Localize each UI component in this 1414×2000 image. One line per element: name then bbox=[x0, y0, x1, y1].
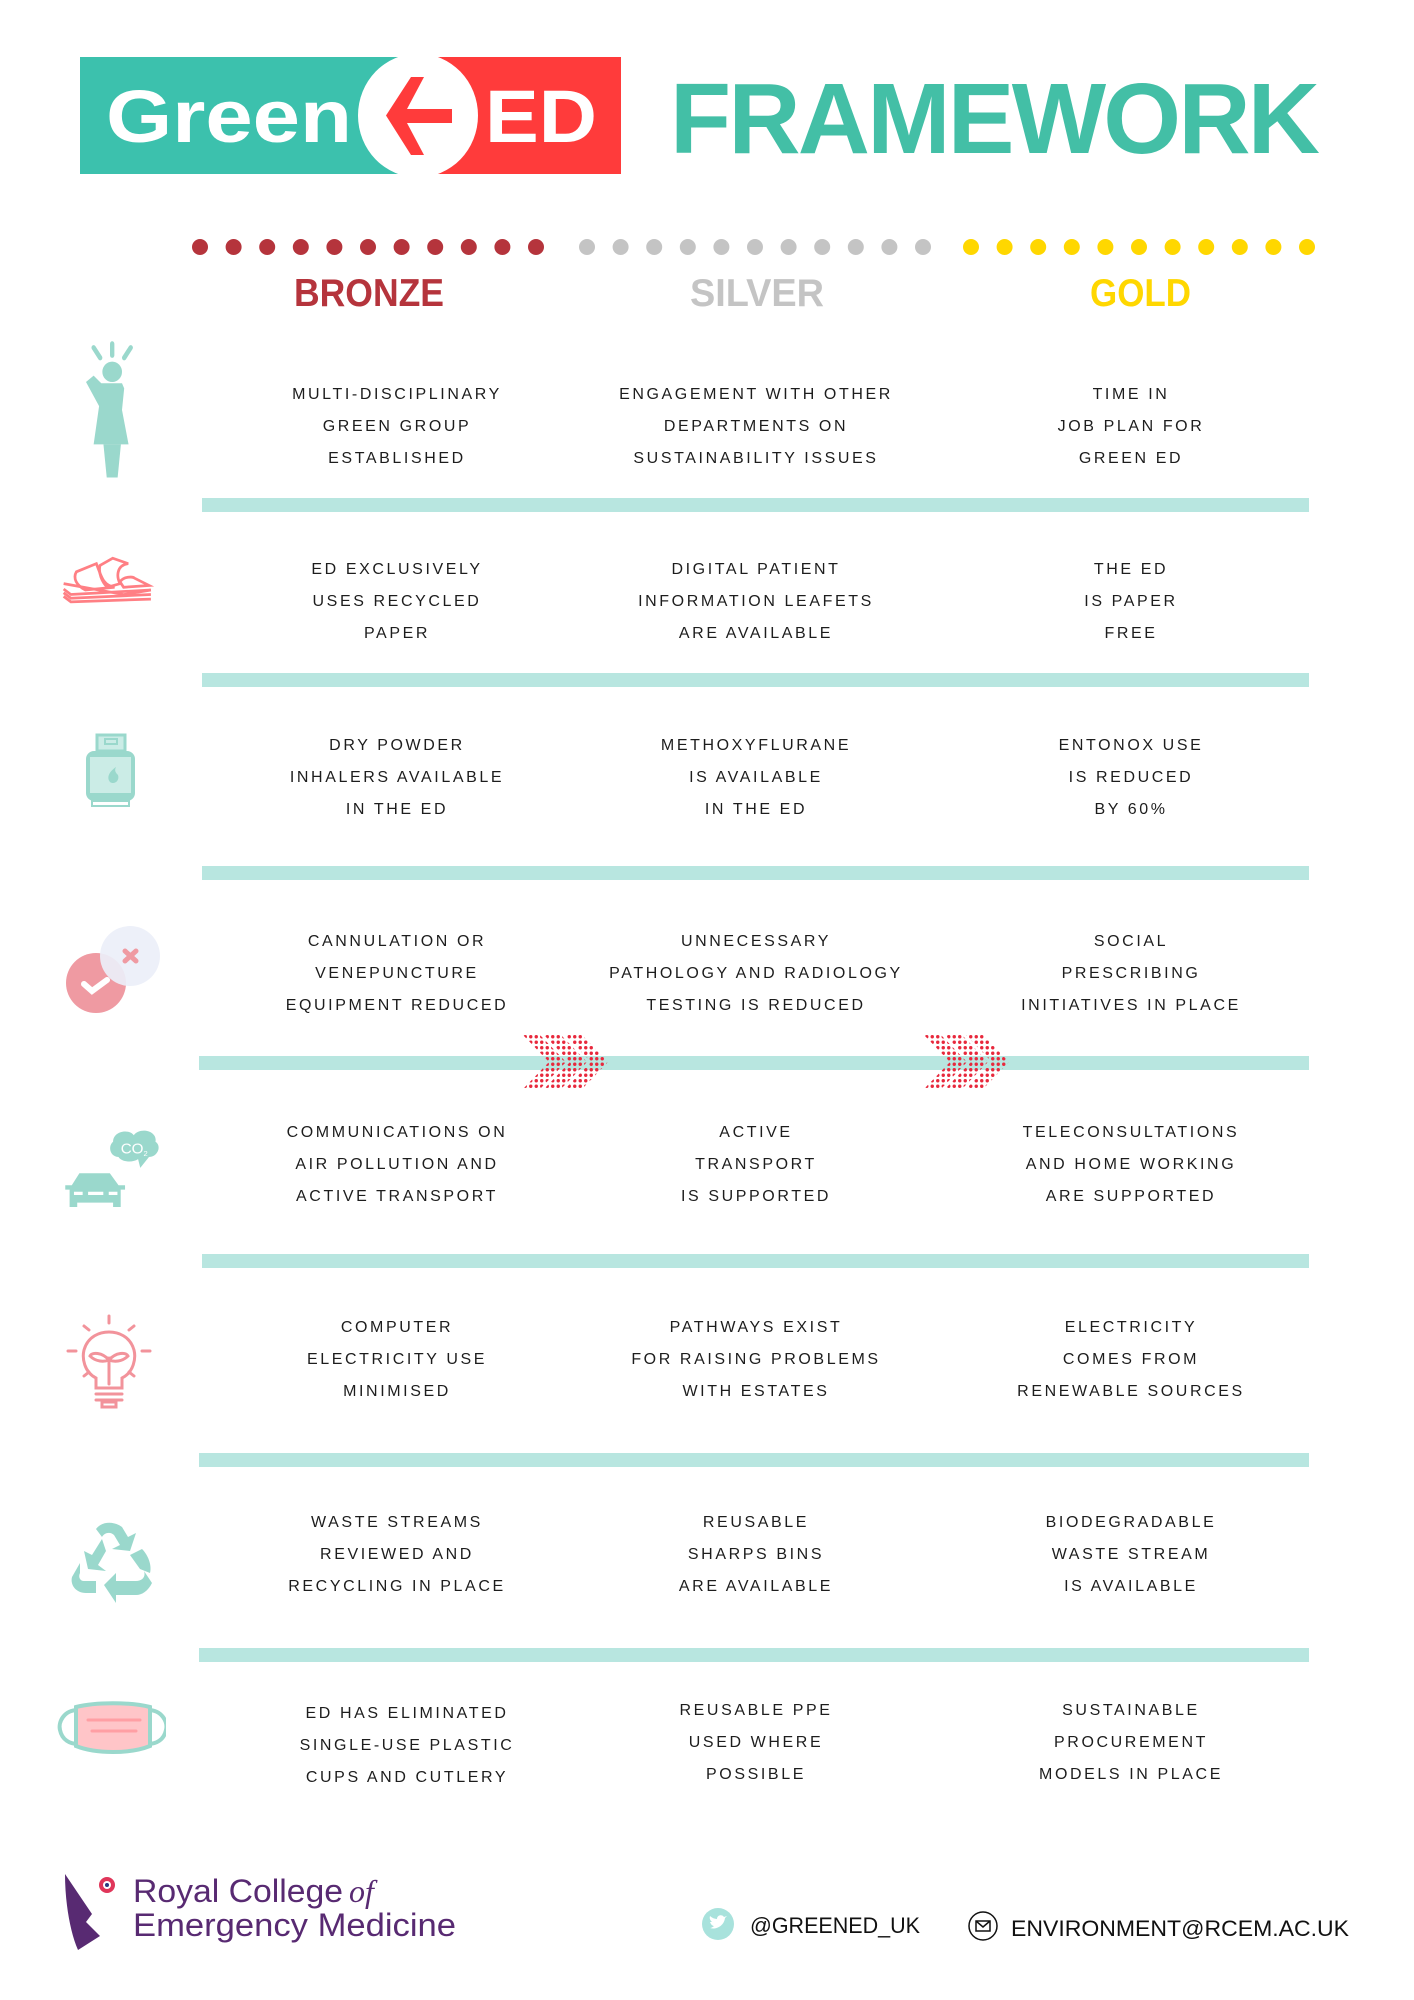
row 6 text: MINIMISED bbox=[343, 1383, 451, 1400]
text: FOR RAISING PROBLEMS bbox=[631, 1351, 881, 1368]
text: IS PAPER bbox=[1084, 593, 1178, 610]
footer logo: Royal College of Emergency Medicine: Royal College bbox=[133, 1873, 343, 1909]
text: REUSABLE PPE bbox=[679, 1702, 833, 1719]
text: UNNECESSARY bbox=[681, 933, 831, 950]
text: DEPARTMENTS ON bbox=[664, 418, 848, 435]
row 4 text bbox=[286, 933, 508, 1014]
row 1 text bbox=[292, 386, 502, 467]
footer: twitter handle bbox=[702, 1908, 920, 1940]
text: IN THE ED bbox=[705, 801, 807, 818]
icon: car with CO2 cloud bbox=[65, 1130, 159, 1207]
row 2 text: PAPER bbox=[364, 625, 430, 642]
text: USED WHERE bbox=[689, 1734, 823, 1751]
icon: lightbulb with leaves bbox=[66, 1314, 152, 1408]
text: PRESCRIBING bbox=[1062, 965, 1200, 982]
text: TESTING IS REDUCED bbox=[646, 997, 866, 1014]
icon: check and cross circles bbox=[66, 926, 160, 1013]
footer logo: Royal College of Emergency Medicine: of bbox=[349, 1873, 378, 1909]
footer logo: Royal College of Emergency Medicine: Emergency Medicine bbox=[133, 1907, 456, 1943]
footer: twitter handle: @GREENED_UK bbox=[750, 1913, 920, 1938]
level headers: dots and labels bbox=[192, 239, 1315, 315]
text: AND HOME WORKING bbox=[1026, 1156, 1236, 1173]
text: BY 60% bbox=[1094, 801, 1168, 818]
text: GREEN ED bbox=[1079, 450, 1183, 467]
row 6 text: ELECTRICITY USE bbox=[307, 1351, 487, 1368]
text: INITIATIVES IN PLACE bbox=[1021, 997, 1241, 1014]
text: PROCUREMENT bbox=[1054, 1734, 1208, 1751]
row 3 text: IN THE ED bbox=[346, 801, 448, 818]
row 7 text: RECYCLING IN PLACE bbox=[288, 1578, 506, 1595]
text: MODELS IN PLACE bbox=[1039, 1766, 1223, 1783]
row 2 text: USES RECYCLED bbox=[313, 593, 481, 610]
text: TRANSPORT bbox=[695, 1156, 817, 1173]
icon: recycled paper bbox=[62, 556, 154, 604]
row 1 text: MULTI-DISCIPLINARY bbox=[292, 386, 502, 403]
row 3 text bbox=[290, 737, 504, 818]
text: IS AVAILABLE bbox=[689, 769, 823, 786]
text: PATHOLOGY AND RADIOLOGY bbox=[609, 965, 903, 982]
row 2 text: ED EXCLUSIVELY bbox=[311, 561, 483, 578]
row 7 text: WASTE STREAMS bbox=[311, 1514, 483, 1531]
text: THE ED bbox=[1094, 561, 1168, 578]
row 3 text: DRY POWDER bbox=[329, 737, 465, 754]
row 6 text bbox=[307, 1319, 487, 1400]
level headers: dots and labels: GOLD bbox=[1090, 272, 1191, 315]
text: ARE SUPPORTED bbox=[1046, 1188, 1216, 1205]
footer: email: ENVIRONMENT@RCEM.AC.UK bbox=[1011, 1916, 1349, 1941]
text: DIGITAL PATIENT bbox=[671, 561, 841, 578]
text: SOCIAL bbox=[1094, 933, 1168, 950]
text: ARE AVAILABLE bbox=[679, 625, 833, 642]
text: RENEWABLE SOURCES bbox=[1017, 1383, 1245, 1400]
dividers bbox=[202, 498, 1309, 512]
icon: recycle arrows bbox=[72, 1522, 152, 1603]
text: TIME IN bbox=[1093, 386, 1169, 403]
logo: GreenED: Green bbox=[106, 75, 352, 158]
row 3 text: INHALERS AVAILABLE bbox=[290, 769, 504, 786]
row 1 text: GREEN GROUP bbox=[323, 418, 471, 435]
footer logo: Royal College of Emergency Medicine bbox=[65, 1873, 456, 1950]
arrows: dotted chevrons bbox=[524, 1035, 1008, 1088]
logo: GreenED bbox=[80, 57, 621, 174]
text: PATHWAYS EXIST bbox=[670, 1319, 842, 1336]
row 5 text bbox=[287, 1124, 507, 1205]
text: REUSABLE bbox=[703, 1514, 809, 1531]
logo: GreenED: ED bbox=[485, 75, 597, 158]
icon: person raising hand bbox=[86, 341, 133, 478]
row 5 text: COMMUNICATIONS ON bbox=[287, 1124, 507, 1141]
row 6 text: COMPUTER bbox=[341, 1319, 453, 1336]
row 5 text: ACTIVE TRANSPORT bbox=[296, 1188, 498, 1205]
row 4 text: VENEPUNCTURE bbox=[315, 965, 479, 982]
text: TELECONSULTATIONS bbox=[1023, 1124, 1239, 1141]
level headers: dots and labels: BRONZE bbox=[294, 272, 444, 315]
text: ELECTRICITY bbox=[1065, 1319, 1197, 1336]
icon: face mask bbox=[58, 1701, 166, 1754]
text: INFORMATION LEAFETS bbox=[638, 593, 874, 610]
row 8 text: ED HAS ELIMINATED bbox=[305, 1705, 509, 1722]
icon: gas cylinder bbox=[86, 734, 135, 807]
icon: car with CO2 cloud: CO bbox=[121, 1141, 144, 1158]
row 7 text bbox=[288, 1514, 506, 1595]
icon: car with CO2 cloud: 2 bbox=[144, 1149, 148, 1158]
row 8 text bbox=[300, 1705, 514, 1786]
text: IS REDUCED bbox=[1069, 769, 1193, 786]
level headers: dots and labels: SILVER bbox=[690, 272, 824, 315]
row 8 text: SINGLE-USE PLASTIC bbox=[300, 1737, 514, 1754]
text: POSSIBLE bbox=[706, 1766, 806, 1783]
text: SHARPS BINS bbox=[688, 1546, 824, 1563]
text: ARE AVAILABLE bbox=[679, 1578, 833, 1595]
text: FREE bbox=[1104, 625, 1158, 642]
text: ENGAGEMENT WITH OTHER bbox=[619, 386, 893, 403]
row 5 text: AIR POLLUTION AND bbox=[295, 1156, 499, 1173]
text: ACTIVE bbox=[719, 1124, 793, 1141]
text: COMES FROM bbox=[1063, 1351, 1199, 1368]
row 7 text: REVIEWED AND bbox=[320, 1546, 474, 1563]
row 2 text bbox=[311, 561, 483, 642]
row 4 text: EQUIPMENT REDUCED bbox=[286, 997, 508, 1014]
text: SUSTAINABILITY ISSUES bbox=[633, 450, 879, 467]
text: WASTE STREAM bbox=[1052, 1546, 1210, 1563]
row 4 text: CANNULATION OR bbox=[308, 933, 486, 950]
text: WITH ESTATES bbox=[682, 1383, 830, 1400]
text: BIODEGRADABLE bbox=[1046, 1514, 1216, 1531]
row 8 text: CUPS AND CUTLERY bbox=[306, 1769, 508, 1786]
text: IS SUPPORTED bbox=[681, 1188, 831, 1205]
row 1 text: ESTABLISHED bbox=[328, 450, 466, 467]
text: IS AVAILABLE bbox=[1064, 1578, 1198, 1595]
text: ENTONOX USE bbox=[1059, 737, 1203, 754]
text: METHOXYFLURANE bbox=[661, 737, 851, 754]
text: JOB PLAN FOR bbox=[1058, 418, 1204, 435]
text: SUSTAINABLE bbox=[1062, 1702, 1200, 1719]
